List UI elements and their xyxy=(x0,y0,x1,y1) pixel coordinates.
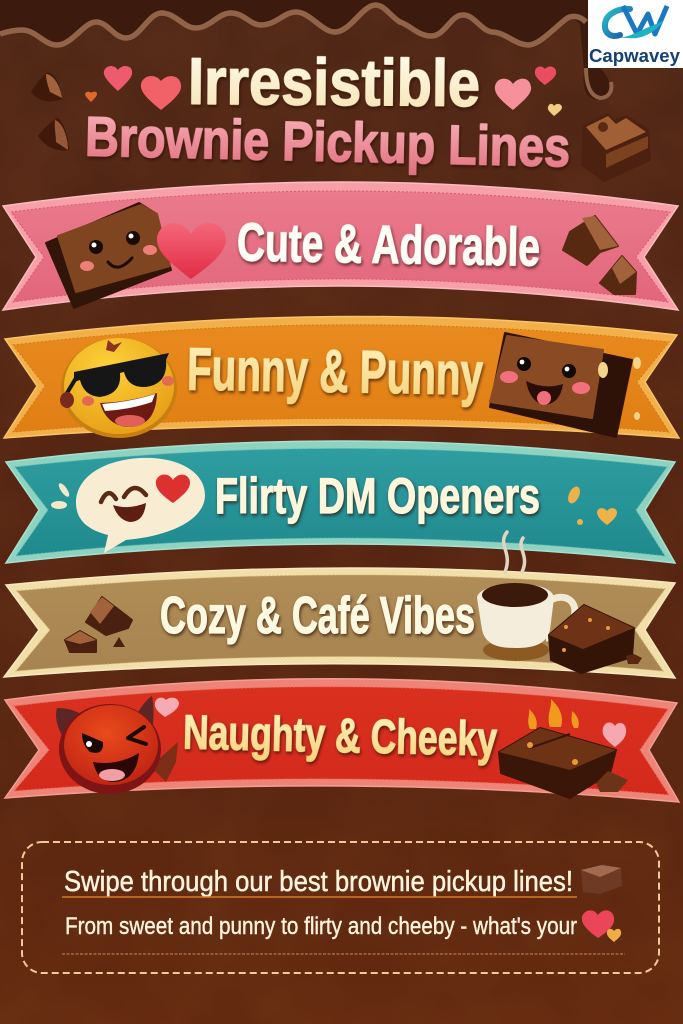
icon: red heart xyxy=(157,223,226,279)
icon: laughing brownie xyxy=(490,333,641,437)
icon: hearts left xyxy=(85,66,181,110)
panel: Funny & Punny banner xyxy=(4,316,679,438)
logo: Capwavey: Capwavey xyxy=(589,46,680,66)
panel: call to action xyxy=(22,842,659,973)
panel: Cute & Adorable banner xyxy=(3,182,678,310)
icons: sparkles and heart right xyxy=(566,485,617,525)
title line 1: Irresistible xyxy=(188,44,480,120)
icon: brownie with flames xyxy=(499,699,628,798)
dotted divider xyxy=(62,953,625,955)
icon: pink heart xyxy=(155,698,179,717)
icon: layered brownie xyxy=(582,114,650,181)
panel: Flirty DM Openers banner xyxy=(6,441,675,563)
label: Naughty & Cheeky: Naughty & Cheeky xyxy=(183,706,498,767)
icon: smiling brownie xyxy=(46,203,171,308)
icon: chocolate piece xyxy=(581,865,622,894)
panel: Naughty & Cheeky banner xyxy=(5,679,679,802)
text: subtitle line: From sweet and punny to flirty and cheeby - what's your xyxy=(65,913,577,940)
title xyxy=(85,44,571,179)
icon: winking devil xyxy=(56,696,178,794)
icon: hearts xyxy=(582,910,621,942)
icon: brownie slice xyxy=(549,605,642,673)
chocolate drip xyxy=(0,0,611,100)
underline xyxy=(62,896,577,898)
icon: emoji with sunglasses xyxy=(60,338,177,438)
decorative hearts and chocolates around title xyxy=(31,66,650,181)
icon: chocolate pieces xyxy=(563,216,636,294)
icon: hearts right xyxy=(495,67,562,116)
icons: sparks left xyxy=(51,482,71,509)
icon: coffee cup on saucer with steam xyxy=(477,532,575,661)
icon: chocolate chunks left xyxy=(31,72,69,150)
title line 2: Brownie Pickup Lines xyxy=(85,105,571,179)
logo: Capwavey xyxy=(588,0,683,68)
icon: speech bubble with face xyxy=(76,458,205,553)
text: swipe line: Swipe through our best brownie pickup lines! xyxy=(64,866,573,898)
label: Funny & Punny: Funny & Punny xyxy=(186,335,484,408)
icon: chocolate chunks xyxy=(65,597,132,652)
panel: Cozy & Café Vibes banner xyxy=(4,532,675,678)
label: Cute & Adorable: Cute & Adorable xyxy=(236,212,541,278)
label: Flirty DM Openers: Flirty DM Openers xyxy=(215,468,540,524)
label: Cozy & Café Vibes: Cozy & Café Vibes xyxy=(160,587,475,645)
